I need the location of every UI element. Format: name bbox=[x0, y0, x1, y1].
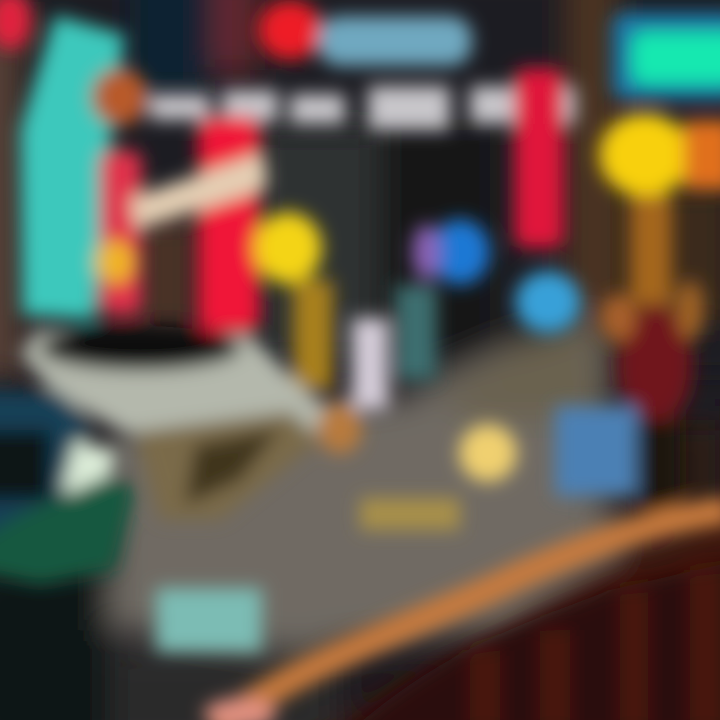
orange railing bbox=[215, 510, 720, 720]
car front shadow detail bbox=[135, 412, 320, 520]
figure legs bbox=[640, 420, 680, 510]
gold post bbox=[293, 280, 333, 390]
light blue pill sign bbox=[318, 16, 472, 66]
neon green sign bbox=[632, 32, 720, 84]
dark teal car bbox=[0, 390, 92, 540]
pink red banner left bbox=[100, 150, 142, 315]
blue road sign bbox=[555, 406, 637, 496]
blue round light bbox=[430, 219, 490, 285]
red round sign bbox=[258, 0, 322, 60]
orange round sign bbox=[92, 68, 148, 126]
orange car light bbox=[318, 402, 362, 454]
yellow road text bbox=[360, 498, 460, 530]
railing pink end bbox=[204, 698, 276, 720]
red corner light bbox=[0, 0, 32, 50]
blurred white heading text bbox=[150, 86, 576, 130]
yellow road dot bbox=[459, 424, 517, 482]
dark car body bbox=[0, 430, 50, 500]
yellow round light bbox=[254, 212, 322, 284]
orange shoulder bbox=[600, 294, 636, 342]
white car bbox=[20, 330, 340, 440]
orange arm bbox=[676, 280, 704, 340]
dark red railing base bbox=[340, 560, 720, 720]
car windshield bbox=[40, 326, 240, 370]
cream diagonal bar bbox=[130, 152, 268, 230]
dark red stripes bbox=[470, 570, 720, 720]
car dark reflection bbox=[185, 428, 280, 505]
orange column right bbox=[630, 195, 672, 305]
green car body bbox=[0, 475, 135, 585]
purple glow bbox=[412, 224, 440, 280]
white car stripe bbox=[62, 440, 118, 498]
red banner right bbox=[514, 68, 564, 248]
dim teal panel bbox=[395, 285, 437, 380]
red banner centre bbox=[198, 116, 260, 332]
neon blue halo bbox=[612, 12, 720, 100]
teal building sign bbox=[20, 15, 125, 320]
orange glow right bbox=[684, 120, 720, 190]
light teal road sign bbox=[156, 588, 262, 652]
pale pink post bbox=[352, 318, 388, 410]
cyan round light bbox=[515, 271, 581, 333]
small yellow light bbox=[95, 240, 135, 284]
figure in red bbox=[617, 305, 693, 425]
yellow glow right bbox=[599, 113, 691, 197]
